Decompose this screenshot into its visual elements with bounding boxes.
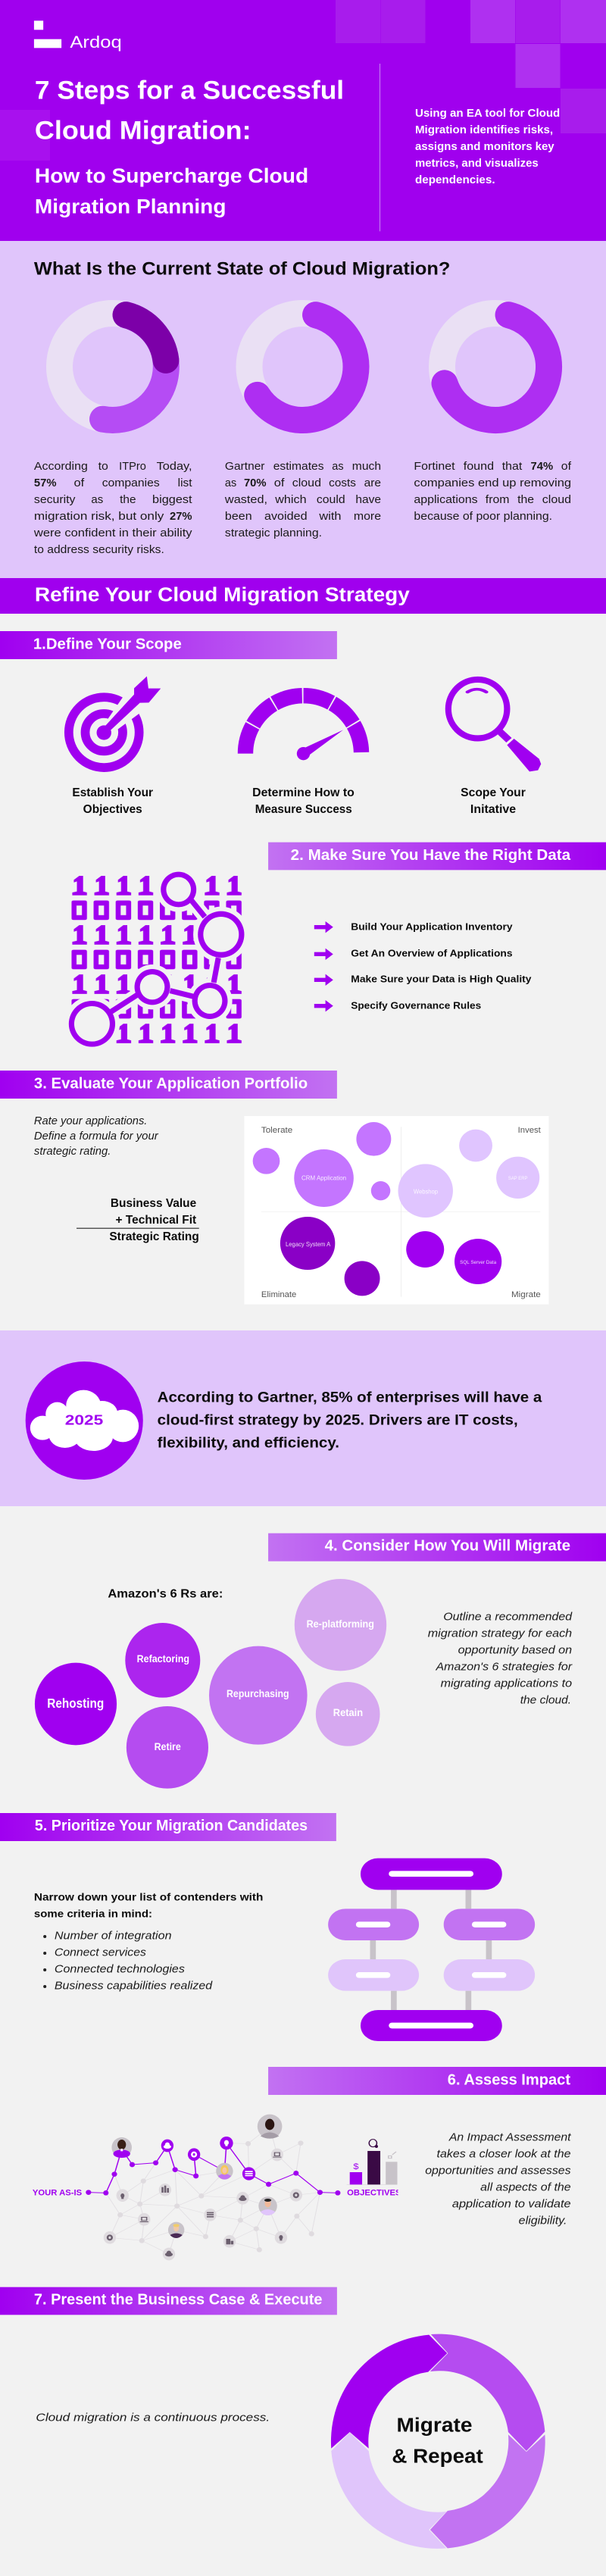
panel: refine strategy banner bbox=[0, 578, 606, 614]
path nodes bbox=[86, 2137, 340, 2196]
intro text bbox=[415, 107, 560, 186]
chart: TIME quadrant bubble chart: CRM Application bbox=[301, 1174, 346, 1182]
person: woman with purple top bbox=[111, 2137, 132, 2158]
label: scope initiative bbox=[461, 786, 526, 816]
panel: step 6 assess impact bbox=[33, 2067, 606, 2260]
text: ITPro statistic: of bbox=[73, 477, 85, 489]
text: Gartner statistic: costs bbox=[329, 477, 356, 489]
label: establish objectives bbox=[72, 786, 153, 816]
bubble: rehosting bbox=[35, 1663, 117, 1745]
step 6 heading bbox=[268, 2067, 606, 2095]
formula: Business Value bbox=[111, 1197, 196, 1210]
panel: step 2 right data bbox=[64, 843, 606, 1052]
intro text: metrics, and visualizes bbox=[415, 157, 539, 170]
text: Gartner statistic bbox=[224, 461, 381, 539]
callout text bbox=[158, 1390, 542, 1451]
chart: migrate and repeat cycle: Migrate bbox=[396, 2415, 472, 2437]
chart: TIME quadrant bubble chart bbox=[244, 1116, 548, 1305]
icon: magnifier bbox=[448, 680, 541, 771]
text: criteria intro: Narrow down your list of contenders with bbox=[34, 1891, 263, 1903]
panel: header bbox=[0, 0, 606, 241]
subheading: Amazon's 6 Rs: Amazon's 6 Rs are: bbox=[108, 1588, 223, 1601]
bubble: re-platforming: Re-platforming bbox=[307, 1618, 374, 1630]
text: ITPro statistic: Today, bbox=[157, 461, 192, 473]
text: Gartner statistic: Gartner bbox=[225, 461, 264, 473]
panel: refine strategy banner: Refine Your Cloud Migration Strategy bbox=[35, 584, 410, 606]
subtitle: How to Supercharge Cloud bbox=[35, 164, 308, 187]
panel: step 7 business case bbox=[0, 2287, 545, 2549]
text: ITPro statistic: security bbox=[34, 494, 76, 506]
diagram: impact network bbox=[33, 2115, 401, 2260]
text: Gartner statistic: with bbox=[319, 511, 342, 523]
logo bbox=[34, 20, 122, 52]
chart: TIME quadrant bubble chart: SAP ERP bbox=[508, 1175, 528, 1181]
label: scope initiative: Initative bbox=[470, 803, 516, 816]
panel: step 1 define your scope bbox=[0, 631, 541, 816]
panel: step 4 how you will migrate bbox=[35, 1533, 606, 1789]
title bbox=[35, 76, 344, 145]
label: measure success: Measure Success bbox=[255, 803, 352, 816]
text: ITPro statistic: migration risk, but only bbox=[34, 511, 164, 523]
text: ITPro statistic: as bbox=[91, 494, 103, 506]
text: Fortinet statistic: cloud bbox=[542, 494, 571, 506]
text: migration strategy bbox=[428, 1611, 573, 1707]
step 3 heading: 3. Evaluate Your Application Portfolio bbox=[34, 1076, 308, 1092]
text: Gartner statistic: 70% bbox=[244, 477, 267, 489]
step 5 heading bbox=[0, 1813, 336, 1841]
text: ITPro statistic: to bbox=[98, 461, 108, 473]
title: Cloud Migration: bbox=[35, 116, 251, 145]
arrow item: overview bbox=[314, 947, 513, 960]
bubble: re-platforming bbox=[295, 1579, 386, 1671]
chart: TIME quadrant bubble chart: SQL Server Data bbox=[460, 1259, 496, 1265]
step 1 heading: 1.Define Your Scope bbox=[33, 636, 182, 652]
network gray links bbox=[106, 2127, 320, 2254]
text: Gartner statistic: have bbox=[355, 494, 381, 506]
title: 7 Steps for a Successful bbox=[35, 76, 344, 105]
list: data tasks bbox=[314, 921, 532, 1011]
panel: step 3 evaluate portfolio bbox=[0, 1071, 548, 1305]
text: Gartner statistic: been bbox=[225, 511, 252, 523]
text: Fortinet statistic: applications bbox=[414, 494, 478, 506]
arrow item: inventory bbox=[314, 921, 513, 933]
chart: TIME quadrant bubble chart: Webshop bbox=[414, 1189, 438, 1196]
text: ITPro statistic bbox=[33, 461, 192, 556]
label: scope initiative: Scope Your bbox=[461, 786, 526, 799]
chart: TIME quadrant bubble chart: Legacy System A bbox=[286, 1242, 330, 1248]
text: impact assessment: all aspects of the bbox=[480, 2181, 571, 2194]
text: ITPro statistic: the bbox=[120, 494, 136, 506]
text: rate applications: Rate your applications. bbox=[34, 1115, 147, 1127]
bubble: rehosting: Rehosting bbox=[47, 1696, 104, 1711]
text: Gartner statistic: much bbox=[352, 461, 381, 473]
bubble: repurchasing: Repurchasing bbox=[226, 1688, 289, 1699]
list: criteria: Connect services bbox=[55, 1946, 146, 1959]
as-is to objectives purple path bbox=[89, 2143, 338, 2193]
chart: TIME quadrant bubble chart: Eliminate bbox=[261, 1290, 296, 1299]
chart: donut 57 percent bbox=[59, 314, 167, 420]
label: measure success bbox=[252, 786, 355, 816]
chart: migrate and repeat cycle bbox=[331, 2334, 545, 2549]
step 7 heading bbox=[0, 2287, 337, 2315]
arrow item: governance: Specify Governance Rules bbox=[351, 999, 481, 1011]
icon: target bbox=[69, 677, 162, 767]
arrow item: inventory: Build Your Application Inventory bbox=[351, 921, 513, 932]
label: your as-is: YOUR AS-IS bbox=[33, 2188, 82, 2197]
icon: 2025 cloud bbox=[26, 1361, 143, 1480]
text: impact assessment bbox=[425, 2131, 571, 2227]
text: Gartner statistic: strategic planning. bbox=[225, 527, 322, 539]
arrow item: quality bbox=[314, 973, 532, 986]
text: Gartner statistic: wasted, bbox=[224, 494, 267, 506]
intro text: dependencies. bbox=[415, 174, 495, 186]
bubble: retain bbox=[316, 1682, 380, 1746]
step 1 heading bbox=[0, 631, 337, 659]
list: criteria bbox=[43, 1930, 213, 1993]
label: measure success: Determine How to bbox=[252, 786, 355, 799]
subtitle bbox=[35, 164, 308, 218]
bubble: retain: Retain bbox=[333, 1707, 363, 1718]
text: continuous process: Cloud migration is a continuous process. bbox=[36, 2412, 270, 2424]
diagram: prioritization flow bbox=[328, 1859, 535, 2041]
bubble: retire: Retire bbox=[155, 1741, 181, 1752]
icon: gauge bbox=[245, 696, 361, 760]
label: establish objectives: Establish Your bbox=[72, 786, 153, 799]
text: Fortinet statistic: found bbox=[464, 461, 494, 473]
person: blond man bbox=[168, 2222, 184, 2238]
arrow item: governance bbox=[314, 999, 481, 1011]
mini bar chart: objectives: $ bbox=[353, 2162, 358, 2171]
panel: Gartner callout bbox=[0, 1330, 606, 1506]
text: Gartner statistic: which bbox=[274, 494, 307, 506]
text: Gartner statistic: avoided bbox=[264, 511, 308, 523]
bubble: refactoring bbox=[125, 1623, 200, 1698]
step 4 heading bbox=[268, 1533, 606, 1562]
text: Fortinet statistic bbox=[414, 461, 572, 523]
text: rate applications: strategic rating. bbox=[34, 1146, 111, 1158]
text: ITPro statistic: to address security risks. bbox=[34, 544, 164, 556]
text: ITPro statistic: were confident in their ability bbox=[33, 527, 192, 539]
chart: migrate and repeat cycle: & Repeat bbox=[392, 2446, 483, 2468]
text: Gartner statistic: estimates bbox=[273, 461, 324, 473]
text: criteria intro: some criteria in mind: bbox=[34, 1908, 152, 1920]
formula: + Technical Fit bbox=[116, 1214, 196, 1227]
text: Fortinet statistic: the bbox=[517, 494, 534, 506]
text: Fortinet statistic: Fortinet bbox=[414, 461, 455, 473]
bubble: refactoring: Refactoring bbox=[137, 1653, 189, 1665]
header decorative squares bbox=[0, 0, 606, 161]
text: Gartner statistic: more bbox=[354, 511, 381, 523]
path icons bbox=[164, 2140, 253, 2176]
icon: binary data network bbox=[64, 867, 249, 1052]
chart: TIME quadrant bubble chart: Tolerate bbox=[261, 1126, 292, 1135]
person: blonde woman bbox=[216, 2163, 233, 2180]
text: ITPro statistic: ITPro bbox=[119, 461, 146, 473]
bubble: retire bbox=[127, 1706, 208, 1789]
text: Gartner statistic: could bbox=[317, 494, 345, 506]
list: criteria: Connected technologies bbox=[55, 1963, 185, 1976]
text: Gartner statistic: are bbox=[364, 477, 381, 489]
text: rate applications: Define a formula for your bbox=[34, 1130, 158, 1143]
text: impact assessment: eligibility. bbox=[519, 2215, 567, 2227]
formula bbox=[77, 1197, 199, 1243]
text: Gartner statistic: as bbox=[332, 461, 344, 473]
step 2 heading bbox=[268, 843, 606, 870]
text: ITPro statistic: list bbox=[178, 477, 192, 489]
panel: current state of cloud migration bbox=[0, 241, 606, 578]
step 3 heading bbox=[0, 1071, 337, 1099]
text: Fortinet statistic: of bbox=[561, 461, 572, 473]
chart: TIME quadrant bubble chart: Invest bbox=[518, 1126, 541, 1135]
network gray nodes bbox=[104, 2140, 314, 2260]
formula: Strategic Rating bbox=[109, 1230, 199, 1243]
subtitle: Migration Planning bbox=[35, 195, 226, 218]
text: criteria intro bbox=[34, 1891, 263, 1920]
text: Fortinet statistic: that bbox=[502, 461, 523, 473]
list: criteria: Business capabilities realized bbox=[55, 1980, 213, 1993]
chart: donut 70 percent bbox=[249, 314, 356, 420]
text: Gartner statistic: cloud bbox=[292, 477, 321, 489]
step 7 heading: 7. Present the Business Case & Execute bbox=[34, 2292, 323, 2308]
network gray icons bbox=[107, 2152, 299, 2256]
text: Gartner statistic: of bbox=[274, 477, 285, 489]
mini bar chart: objectives bbox=[347, 2140, 397, 2185]
person: man in lilac bbox=[258, 2196, 277, 2215]
arrow item: overview: Get An Overview of Applications bbox=[351, 947, 513, 958]
list: criteria: Number of integration bbox=[55, 1930, 172, 1943]
bubble: repurchasing bbox=[209, 1646, 308, 1745]
panel background bbox=[0, 241, 606, 578]
text: ITPro statistic: companies bbox=[102, 477, 160, 489]
text: ITPro statistic: 57% bbox=[34, 477, 57, 489]
icon: 2025 cloud: 2025 bbox=[65, 1412, 103, 1428]
header background bbox=[0, 0, 606, 241]
text: ITPro statistic: 27% bbox=[170, 511, 192, 523]
chart: donut 74 percent bbox=[442, 314, 548, 420]
text: Fortinet statistic: 74% bbox=[531, 461, 553, 473]
text: ITPro statistic: According bbox=[34, 461, 88, 473]
label: establish objectives: Objectives bbox=[83, 803, 142, 816]
panel: step 5 prioritize candidates bbox=[0, 1813, 535, 2041]
person: bearded man bbox=[258, 2115, 282, 2139]
text: Fortinet statistic: because of poor planning. bbox=[414, 511, 552, 523]
text: Fortinet statistic: from bbox=[486, 494, 509, 506]
text: rate applications bbox=[34, 1115, 158, 1158]
chart: TIME quadrant bubble chart: Migrate bbox=[511, 1290, 541, 1299]
logo: Ardoq bbox=[70, 33, 122, 52]
step 5 heading: 5. Prioritize Your Migration Candidates bbox=[35, 1818, 308, 1834]
text: ITPro statistic: biggest bbox=[152, 494, 192, 506]
callout text: flexibility, and efficiency. bbox=[158, 1435, 339, 1451]
label: objectives: OBJECTIVES bbox=[347, 2188, 401, 2198]
text: Gartner statistic: as bbox=[225, 477, 236, 489]
text: migration strategy: the cloud. bbox=[520, 1694, 571, 1707]
